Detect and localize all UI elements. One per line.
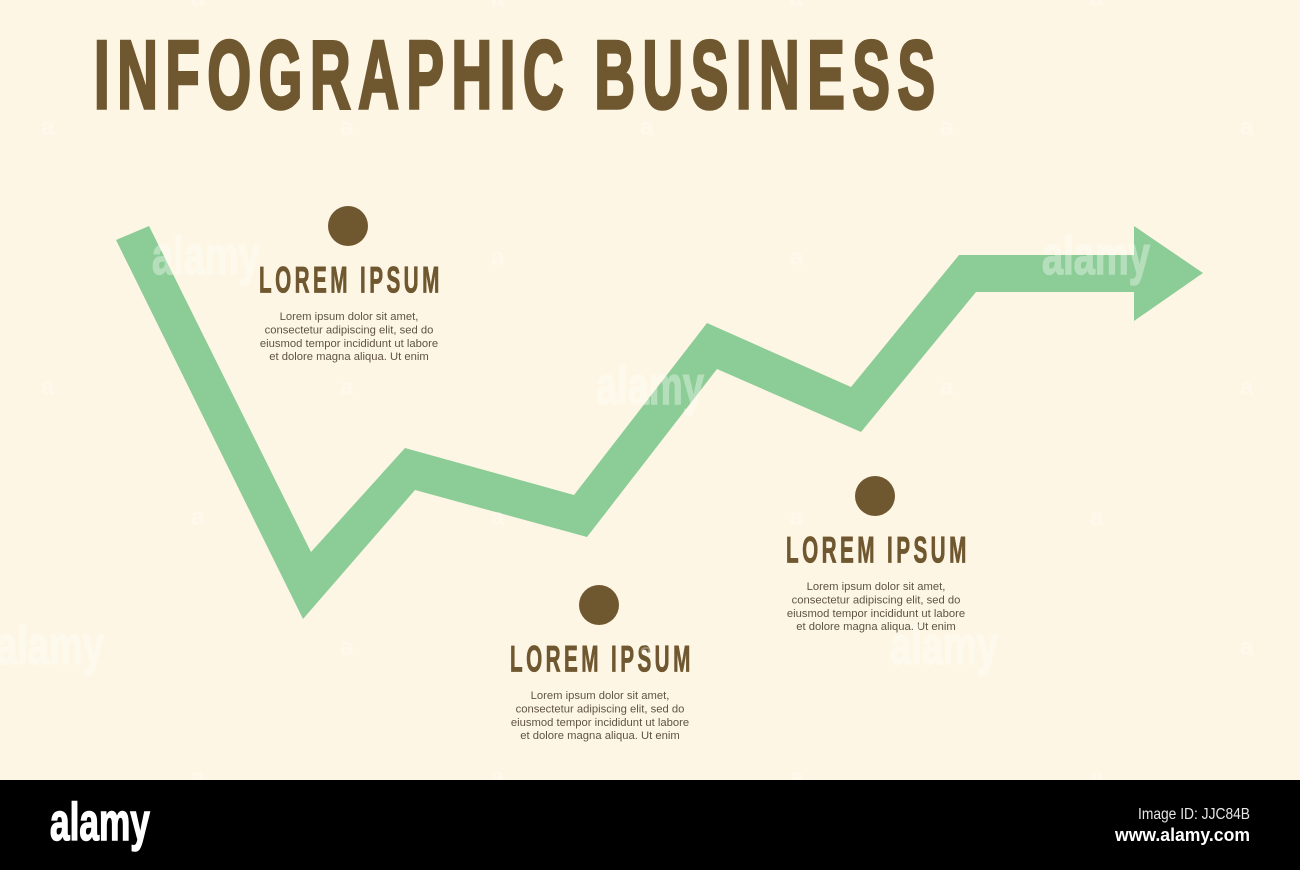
callout heading: LOREM IPSUM [510, 639, 690, 680]
callout: second point [510, 585, 690, 742]
callout body text: eiusmod tempor incididunt ut labore [511, 717, 689, 729]
stock watermarks: a [790, 244, 804, 271]
stock watermarks: a [940, 114, 954, 141]
stock watermarks: a [41, 374, 55, 401]
callout body text: consectetur adipiscing elit, sed do [516, 704, 684, 716]
stock watermarks: a [1240, 114, 1254, 141]
stock watermarks: a [640, 634, 654, 661]
callout body text: et dolore magna aliqua. Ut enim [520, 730, 680, 742]
zigzag growth arrow [116, 226, 1203, 619]
stock watermarks: a [640, 114, 654, 141]
footer bar [0, 780, 1300, 870]
stock watermarks: a [340, 114, 354, 141]
stock watermarks: alamy [152, 225, 260, 286]
stock watermarks: a [1240, 374, 1254, 401]
stock watermarks: a [191, 764, 205, 791]
stock watermarks: a [790, 764, 804, 791]
callout body text: consectetur adipiscing elit, sed do [792, 594, 960, 606]
stock watermarks: a [1240, 634, 1254, 661]
stock watermarks: a [1090, 764, 1104, 791]
callout heading: LOREM IPSUM [259, 260, 439, 301]
callout: first point [259, 206, 439, 363]
callout heading: LOREM IPSUM [786, 530, 966, 571]
stock watermarks: a [340, 374, 354, 401]
callout: third point [786, 476, 966, 633]
stock watermarks: alamy [596, 355, 704, 416]
stock watermarks: a [940, 374, 954, 401]
stock watermarks: alamy [1042, 225, 1150, 286]
callout body text: eiusmod tempor incididunt ut labore [260, 338, 438, 350]
stock watermarks: a [491, 764, 505, 791]
callout body text: eiusmod tempor incididunt ut labore [787, 608, 965, 620]
callout body text: consectetur adipiscing elit, sed do [265, 324, 433, 336]
callout body text: Lorem ipsum dolor sit amet, [807, 581, 945, 593]
marker dot [328, 206, 368, 246]
footer logo: alamy [50, 793, 150, 852]
stock watermarks: a [41, 114, 55, 141]
stock watermarks: a [191, 504, 205, 531]
callout body text: Lorem ipsum dolor sit amet, [531, 690, 669, 702]
marker dot [855, 476, 895, 516]
image id: Image ID: JJC84B [1138, 806, 1250, 823]
stock watermarks: a [1090, 504, 1104, 531]
stock watermarks: alamy [890, 615, 998, 676]
callout body text: Lorem ipsum dolor sit amet, [280, 311, 418, 323]
stock watermarks: a [491, 504, 505, 531]
marker dot [579, 585, 619, 625]
stock watermarks: a [790, 504, 804, 531]
callout body text: et dolore magna aliqua. Ut enim [269, 351, 429, 363]
callout body text: et dolore magna aliqua. Ut enim [796, 621, 956, 633]
website: www.alamy.com [1114, 825, 1250, 845]
title: INFOGRAPHIC BUSINESS [94, 20, 935, 129]
stock watermarks: a [340, 634, 354, 661]
stock watermarks: a [491, 244, 505, 271]
